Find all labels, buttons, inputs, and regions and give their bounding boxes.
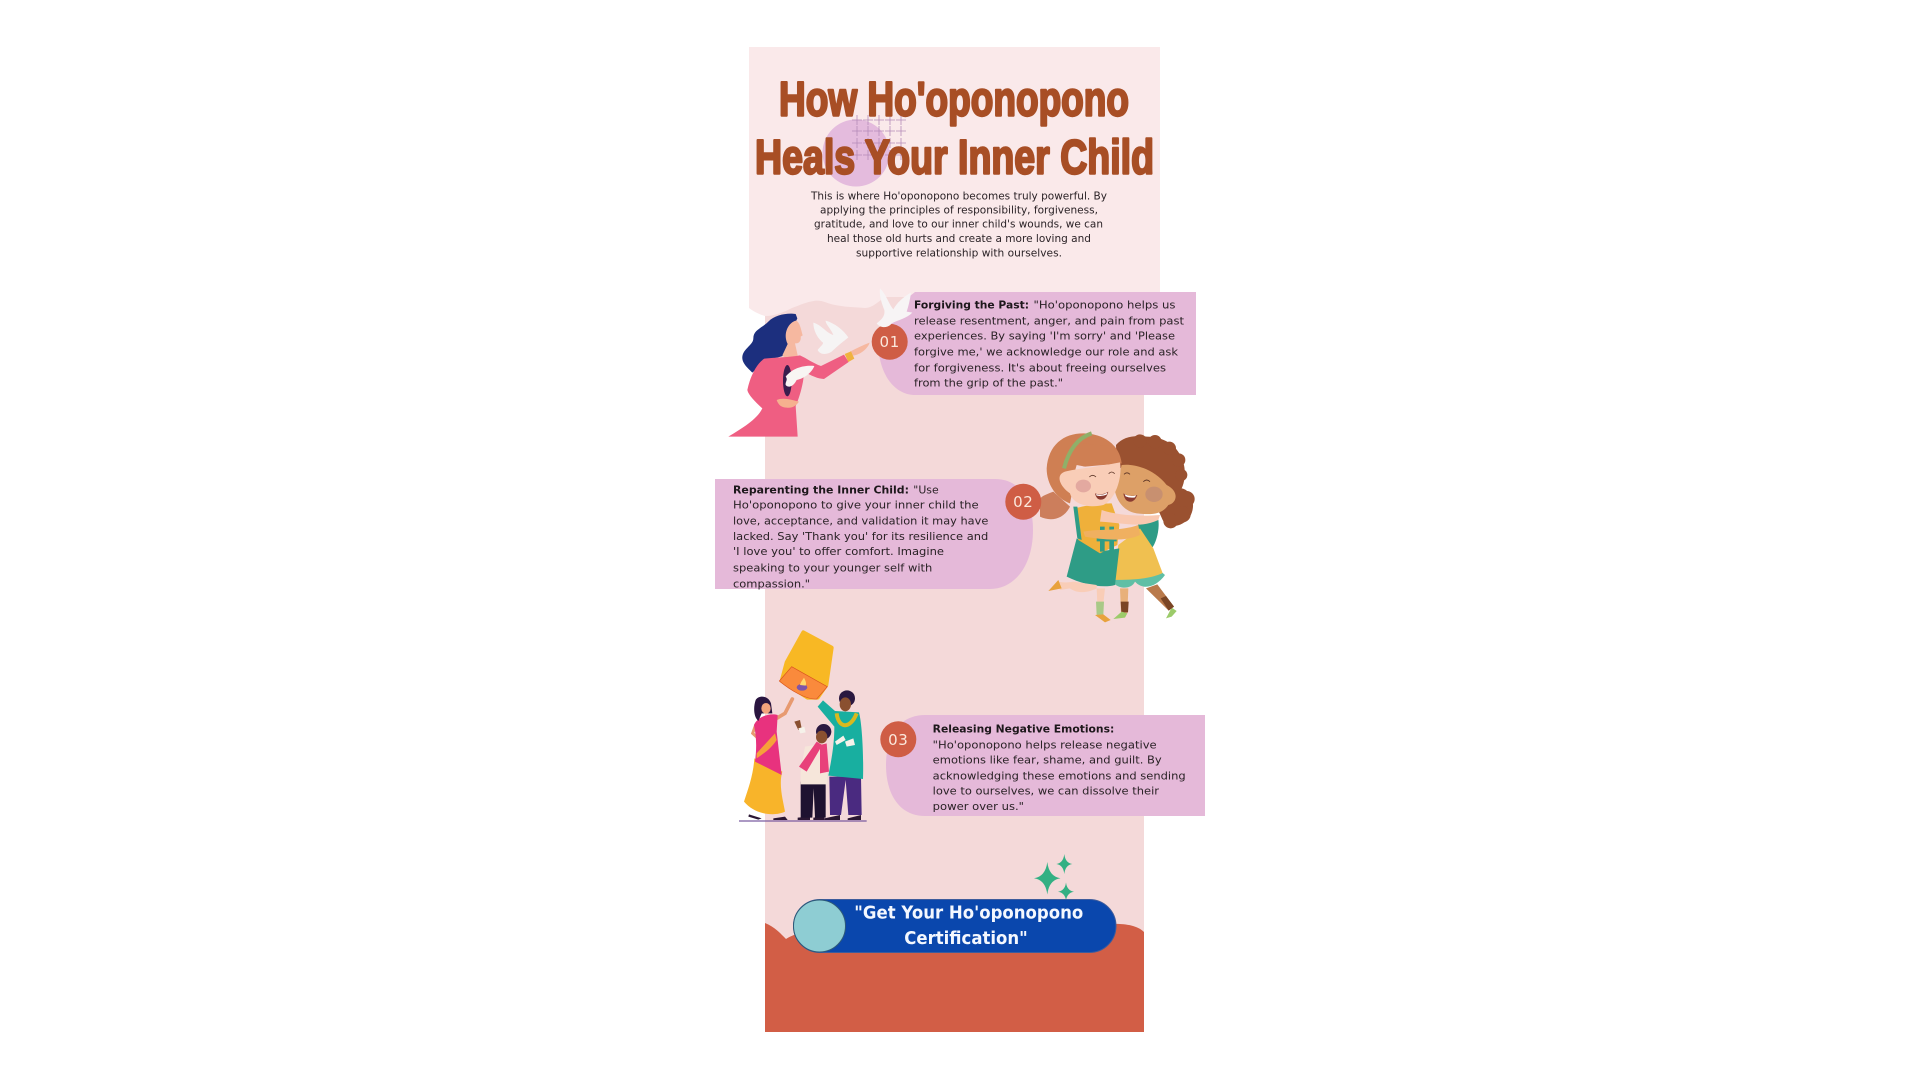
button label bbox=[854, 903, 1083, 949]
illustration: woman releasing doves bbox=[728, 314, 870, 437]
intro text: This is where Ho'oponopono becomes truly powerful. By bbox=[810, 190, 1107, 202]
text: reparenting the inner child: love, acceptance, and validation it may have bbox=[733, 515, 988, 527]
text: reparenting the inner child: Ho'oponopono to give your inner child the bbox=[733, 499, 979, 511]
bubble 03 bbox=[886, 715, 1205, 816]
intro text: gratitude, and love to our inner child's wounds, we can bbox=[814, 218, 1103, 230]
icon: dove over bubble bbox=[877, 288, 912, 327]
title: How Ho'oponopono bbox=[779, 74, 1129, 126]
panel: upper light header bbox=[749, 47, 1160, 316]
bubble 01 bbox=[878, 292, 1196, 395]
intro text: applying the principles of responsibility, forgiveness, bbox=[820, 204, 1098, 216]
text: reparenting the inner child: 'I love you' to offer comfort. Imagine bbox=[733, 546, 944, 558]
text: forgiving the past bbox=[914, 299, 1184, 389]
text: reparenting the inner child: Reparenting the Inner Child: bbox=[733, 484, 909, 496]
illustration: family with sky lantern bbox=[739, 632, 867, 821]
text: forgiving the past: experiences. By saying 'I'm sorry' and 'Please bbox=[914, 330, 1175, 342]
number 01: 01 bbox=[880, 333, 900, 351]
text: releasing negative emotions bbox=[933, 723, 1186, 813]
decoration: plus grid bbox=[852, 115, 906, 160]
text: forgiving the past: forgive me,' we acknowledge our role and ask bbox=[914, 346, 1179, 358]
text: reparenting the inner child: "Use bbox=[913, 484, 939, 496]
button label: Certification" bbox=[904, 929, 1028, 949]
text: forgiving the past: from the grip of the past." bbox=[914, 377, 1063, 389]
number 02: 02 bbox=[1013, 493, 1033, 511]
intro text: supportive relationship with ourselves. bbox=[856, 247, 1062, 259]
panel: orange footer wave bbox=[765, 923, 1144, 1032]
text: releasing negative emotions: power over us." bbox=[933, 801, 1024, 813]
text: releasing negative emotions: emotions like fear, shame, and guilt. By bbox=[933, 754, 1162, 766]
text: releasing negative emotions: "Ho'oponopono helps release negative bbox=[933, 739, 1157, 751]
text: releasing negative emotions: Releasing Negative Emotions: bbox=[933, 723, 1114, 735]
text: reparenting the inner child: lacked. Say 'Thank you' for its resilience and bbox=[733, 531, 988, 543]
text: releasing negative emotions: acknowledging these emotions and sending bbox=[933, 770, 1186, 782]
text: forgiving the past: for forgiveness. It's about freeing ourselves bbox=[914, 362, 1166, 374]
title: Heals Your Inner Child bbox=[755, 132, 1154, 184]
intro text: heal those old hurts and create a more loving and bbox=[827, 233, 1091, 245]
section 03: releasing negative emotions bbox=[739, 632, 1205, 821]
button pill bbox=[794, 900, 1116, 952]
text: reparenting the inner child: speaking to your younger self with bbox=[733, 563, 932, 575]
call to action button bbox=[794, 900, 1116, 952]
illustration: two girls hugging bbox=[1040, 433, 1195, 622]
text: reparenting the inner child: compassion." bbox=[733, 578, 810, 590]
number 02 bbox=[1005, 484, 1041, 520]
text: forgiving the past: release resentment, anger, and pain from past bbox=[914, 315, 1184, 327]
intro text bbox=[810, 190, 1107, 259]
section 01: forgiving the past bbox=[728, 288, 1196, 437]
button circle bbox=[794, 900, 846, 952]
text: forgiving the past: "Ho'oponopono helps us bbox=[1034, 299, 1176, 311]
button label: "Get Your Ho'oponopono bbox=[854, 903, 1083, 923]
number 03 bbox=[880, 721, 916, 757]
bubble 02 bbox=[715, 479, 1033, 589]
number 03: 03 bbox=[888, 731, 908, 749]
panel: lower pink background bbox=[765, 290, 1144, 1032]
title bbox=[755, 74, 1154, 184]
section 02: reparenting the inner child bbox=[715, 433, 1195, 622]
decoration: purple circle bbox=[822, 120, 890, 186]
icon: green sparkles bbox=[1034, 854, 1074, 900]
text: reparenting the inner child bbox=[733, 484, 988, 590]
text: releasing negative emotions: love to ourselves, we can dissolve their bbox=[933, 785, 1160, 797]
text: forgiving the past: Forgiving the Past: bbox=[914, 299, 1029, 311]
number 01 bbox=[872, 324, 908, 360]
